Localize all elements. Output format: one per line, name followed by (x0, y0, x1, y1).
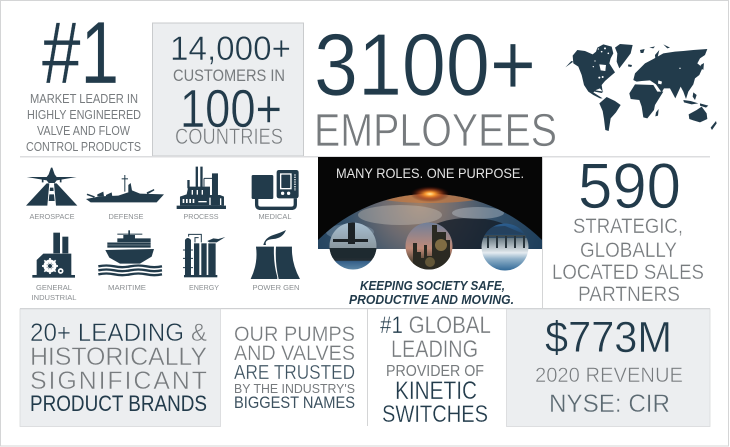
text: market leader description: HIGHLY ENGINEERED (27, 108, 141, 122)
text: historically: HISTORICALLY (30, 343, 207, 371)
icon: medical (252, 170, 299, 208)
divider: upper rule (20, 156, 710, 158)
text: sales partners description (552, 214, 704, 306)
panel: product brands (20, 309, 220, 426)
text: switches: SWITCHES (382, 401, 488, 428)
text: power gen label: POWER GEN (252, 283, 300, 292)
divider: lower rule (20, 308, 710, 309)
stat: 590: 590 (578, 150, 681, 222)
panel: sales partners (552, 150, 704, 306)
text: customers in: CUSTOMERS IN (173, 67, 285, 85)
text: many roles one purpose: MANY ROLES. ONE PURPOSE. (336, 165, 524, 181)
text: employees: EMPLOYEES (314, 104, 557, 156)
icon: aerospace (26, 168, 77, 206)
panel: employees (314, 15, 557, 156)
text: sales partners description: GLOBALLY (580, 238, 677, 262)
text: sales partners description: LOCATED SALES (552, 260, 704, 284)
text: general industrial label (32, 283, 76, 302)
text: aerospace label: AEROSPACE (30, 212, 74, 221)
text: #1 global: #1 GLOBAL (380, 312, 491, 339)
photo: refinery (405, 222, 453, 270)
panel: kinetic switches (380, 312, 491, 428)
text: countries: COUNTRIES (175, 124, 283, 149)
photo: submarine (329, 222, 377, 270)
icon: power gen (251, 230, 300, 279)
stat: 100+: 100+ (180, 79, 282, 139)
panel: many roles image (318, 157, 542, 308)
stat: #1: #1 (42, 3, 119, 102)
divider: vertical rule right of image (542, 157, 543, 309)
text: kinetic: KINETIC (395, 377, 477, 405)
text: market leader description: VALVE AND FLOW (37, 124, 130, 138)
text: sales partners description: PARTNERS (578, 282, 680, 306)
text: sales partners description: STRATEGIC, (573, 214, 683, 238)
text: 2020 revenue: 2020 REVENUE (535, 364, 683, 387)
text: medical label: MEDICAL (258, 212, 292, 221)
text: general industrial label: INDUSTRIAL (32, 293, 76, 302)
text: are trusted: ARE TRUSTED (234, 362, 355, 384)
panel: market leader (26, 3, 141, 154)
panel: pumps and valves (234, 323, 355, 412)
text: keeping society safe: KEEPING SOCIETY SAFE, (360, 278, 505, 293)
earth horizon (318, 190, 542, 249)
panel: industries (26, 167, 300, 302)
text: energy label: ENERGY (189, 283, 219, 292)
stat: 14,000+: 14,000+ (170, 30, 291, 68)
panel: customers and countries (152, 23, 304, 156)
text: significant: SIGNIFICANT (30, 367, 207, 395)
text: market leader description: MARKET LEADER IN (30, 92, 138, 106)
stat: 3100+: 3100+ (314, 15, 536, 114)
text: process label: PROCESS (184, 212, 218, 221)
divider: vertical rule right of pumps (367, 309, 368, 426)
photo: dam spillway (481, 223, 529, 271)
text: biggest names: BIGGEST NAMES (234, 394, 355, 412)
text: leading: LEADING (391, 336, 478, 363)
text: product brands: PRODUCT BRANDS (30, 391, 207, 416)
text: market leader description: CONTROL PRODUCTS (26, 140, 141, 154)
icon: general industrial (32, 233, 75, 278)
text: general industrial label: GENERAL (36, 283, 72, 292)
text: provider of: PROVIDER OF (386, 363, 484, 380)
text: and valves: AND VALVES (234, 342, 355, 365)
icon: energy (183, 234, 225, 277)
text: keeping society safe (349, 278, 514, 307)
icon: maritime (98, 230, 162, 275)
text: keeping society safe: PRODUCTIVE AND MOVING. (349, 292, 514, 307)
panel: revenue (506, 309, 710, 426)
text: market leader description (26, 92, 141, 154)
text: our pumps: OUR PUMPS (234, 323, 355, 346)
text: defense label: DEFENSE (108, 212, 144, 221)
icon: world map (565, 44, 717, 131)
text: 20+ leading: 20+ LEADING & (30, 319, 207, 347)
text: NYSE: CIR: NYSE: CIR (549, 390, 670, 418)
stat: $773M: $773M (545, 313, 672, 362)
icon: process (177, 167, 226, 209)
text: by the industry's: BY THE INDUSTRY'S (234, 382, 355, 396)
text: maritime label: MARITIME (108, 283, 146, 292)
icon: defense (86, 175, 164, 202)
